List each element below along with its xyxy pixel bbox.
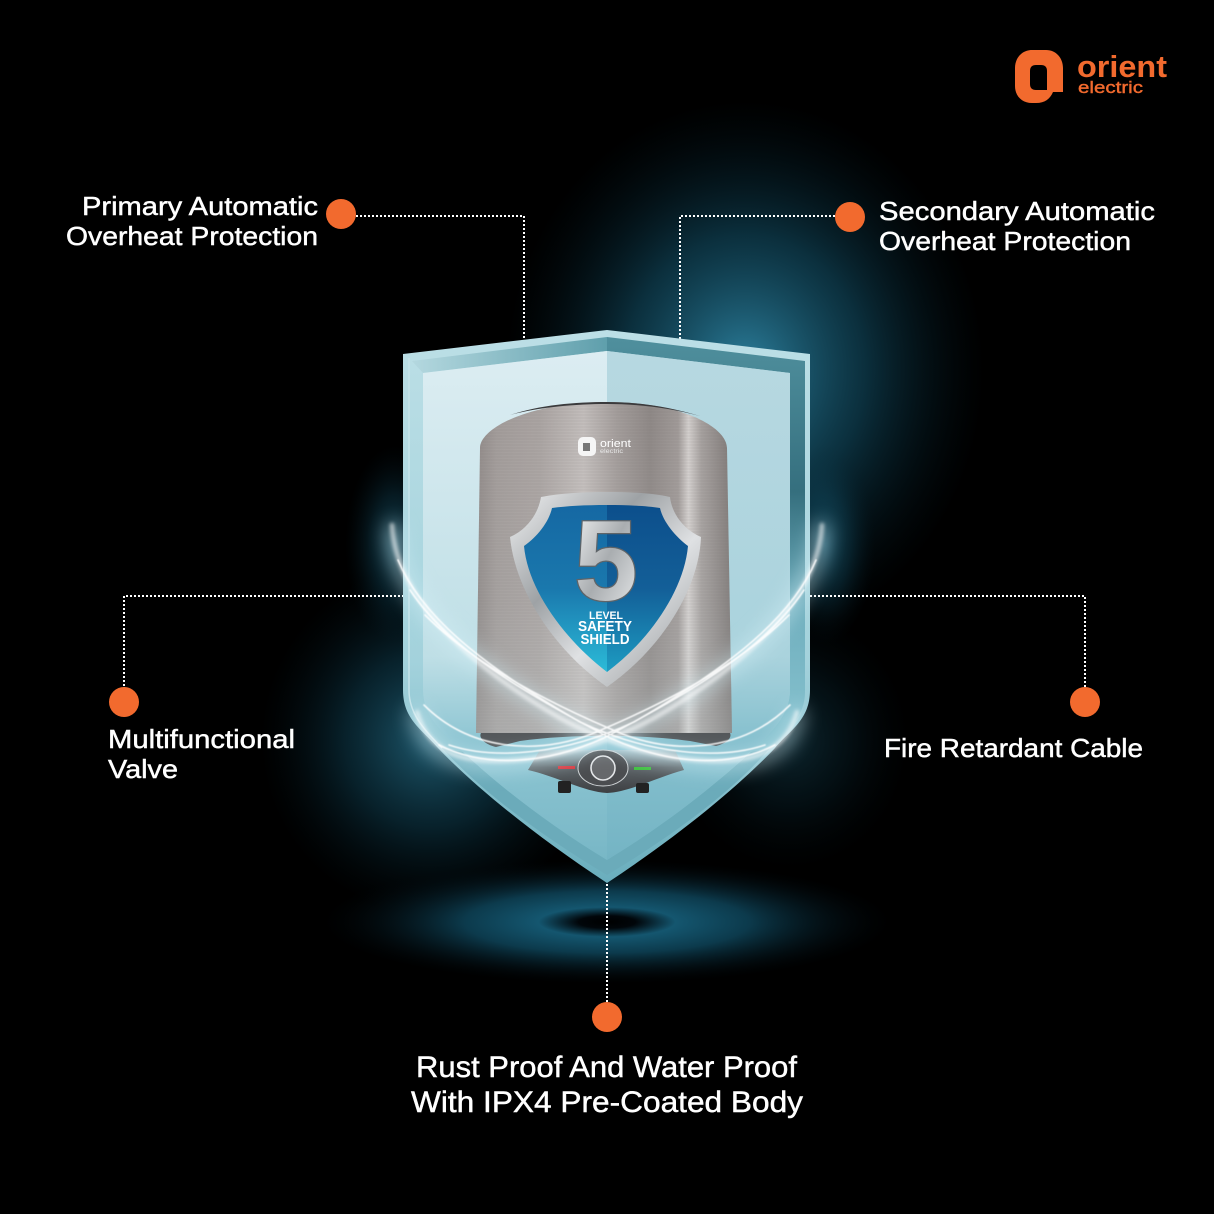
marker dot [326,199,356,229]
swoosh fine lines [398,560,816,760]
badge rim [510,492,701,687]
marker dot [592,1002,622,1032]
connector: fire retardant cable [810,596,1085,690]
dial knob [591,756,615,780]
green indicator [634,767,651,770]
red indicator [558,766,575,769]
label text: Overheat Protection [879,226,1131,256]
connector: multifunctional valve [124,596,404,690]
tank top highlight [510,402,700,416]
label text [411,1051,803,1119]
label text [108,724,295,784]
shield outer shell [403,330,810,883]
product logo: orient [600,438,631,450]
label text: Fire Retardant Cable [884,733,1143,763]
callout: rust proof and water proof [411,1002,803,1119]
marker dot [835,202,865,232]
tank brushed texture [476,402,732,733]
logo word orient: orient [1077,49,1167,84]
shield left edge line [409,358,442,748]
product logo [578,437,631,456]
connector: primary overheat protection [356,216,524,340]
badge blue field right [607,505,688,672]
marker dot [1070,687,1100,717]
light swooshes [392,525,822,763]
ground ripple under shield [322,860,892,984]
connector: rust proof body [606,884,608,1005]
connector: secondary overheat protection [680,216,835,340]
label text: Secondary Automatic [879,196,1155,226]
label text [879,196,1155,256]
callout: multifunctional valve [108,687,295,784]
label text: Multifunctional [108,724,295,754]
callout: fire retardant cable [884,687,1143,763]
label text: Rust Proof And Water Proof [416,1051,798,1084]
dial ring [578,750,628,786]
tank glass fade [476,402,732,733]
callout: primary automatic overheat protection [66,191,356,251]
badge text shield: SHIELD [580,632,630,648]
logo word electric: electric [1078,78,1144,97]
shield lower band [442,748,770,875]
water heater product [476,402,732,793]
glass shield [403,330,810,883]
safety shield badge [510,492,701,687]
product logo: electric [600,449,623,455]
badge text safety: SAFETY [578,619,632,635]
tank bottom cap [480,733,730,747]
label text: Primary Automatic [82,191,318,221]
control panel [528,750,684,793]
callout: secondary automatic overheat protection [835,196,1155,256]
shield right wall [607,351,790,860]
background glow behind shield [260,100,985,915]
tank body [476,402,732,733]
label text: Valve [108,754,178,784]
number five: 5 [574,498,638,625]
marker dot [109,687,139,717]
logo mark [1015,50,1063,103]
label text: With IPX4 Pre-Coated Body [411,1086,803,1119]
swoosh wide glow [394,530,820,763]
badge blue field left [524,505,607,672]
shield left wall [423,351,607,860]
swoosh soft band [392,525,822,761]
brand logo [1015,49,1167,103]
badge text level: LEVEL [589,610,623,622]
label text: Overheat Protection [66,221,318,251]
shield right wall band [607,337,805,752]
label text [66,191,318,251]
shield top left band [412,337,607,373]
